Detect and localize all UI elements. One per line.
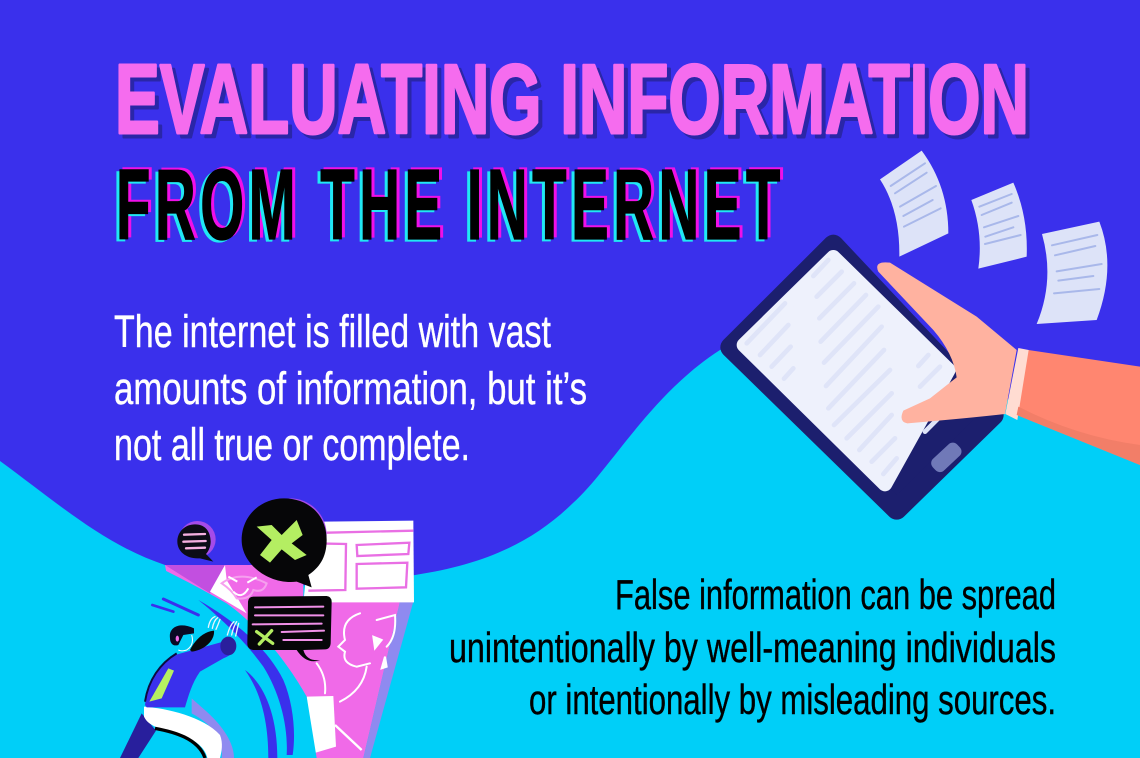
title line 2: FROM THE INTERNET xyxy=(116,150,785,261)
intro text xyxy=(114,306,587,470)
white paper sketch xyxy=(307,696,336,753)
icon: flying paper 3 xyxy=(1037,222,1107,324)
illustration: person pushing a wave of false information xyxy=(100,498,414,758)
purple corner xyxy=(165,565,225,593)
intro text: amounts of information, but it’s xyxy=(114,363,587,414)
black sleeve xyxy=(190,631,214,652)
blue wave strokes xyxy=(152,599,294,758)
closing text xyxy=(449,571,1056,723)
tablet button xyxy=(929,440,964,475)
white angry face sketch xyxy=(210,565,267,613)
icon: large speech bubble with X xyxy=(242,498,327,587)
title xyxy=(113,44,1033,263)
title line 2: FROM THE INTERNET xyxy=(113,152,782,263)
cyan wave xyxy=(0,337,1140,758)
purple beam edge xyxy=(363,602,413,758)
person back leg xyxy=(120,713,156,758)
white face sketch xyxy=(317,613,395,702)
icon: small speech bubble xyxy=(177,521,216,562)
trouser shadow xyxy=(155,728,205,758)
icon: flying paper 1 xyxy=(880,151,948,257)
pink projection panel xyxy=(165,565,400,758)
icon: text speech bubble xyxy=(247,596,332,661)
person face xyxy=(178,635,192,651)
torso highlight xyxy=(149,668,174,702)
white web window xyxy=(303,521,414,602)
icon: hand xyxy=(877,262,1140,465)
person hair xyxy=(170,625,194,645)
title line 2: FROM THE INTERNET xyxy=(119,148,788,259)
illustration: tablet, hand and papers xyxy=(731,151,1140,509)
icon: tablet xyxy=(731,245,993,509)
icon: arm sleeve xyxy=(1017,350,1140,465)
wave strokes and person xyxy=(120,599,294,758)
cyan wave blob xyxy=(100,538,317,758)
tablet text lines xyxy=(747,260,942,474)
person hand xyxy=(220,637,236,655)
person torso xyxy=(145,641,235,707)
tablet screen xyxy=(744,257,948,484)
person trousers xyxy=(144,707,222,758)
motion lines at hands xyxy=(208,617,239,636)
person shadow xyxy=(192,698,234,758)
intro text: not all true or complete. xyxy=(114,419,470,470)
intro text: The internet is filled with vast xyxy=(114,306,551,357)
icon: flying paper 2 xyxy=(971,183,1027,269)
person ear xyxy=(176,636,179,642)
torso outline xyxy=(145,653,177,702)
